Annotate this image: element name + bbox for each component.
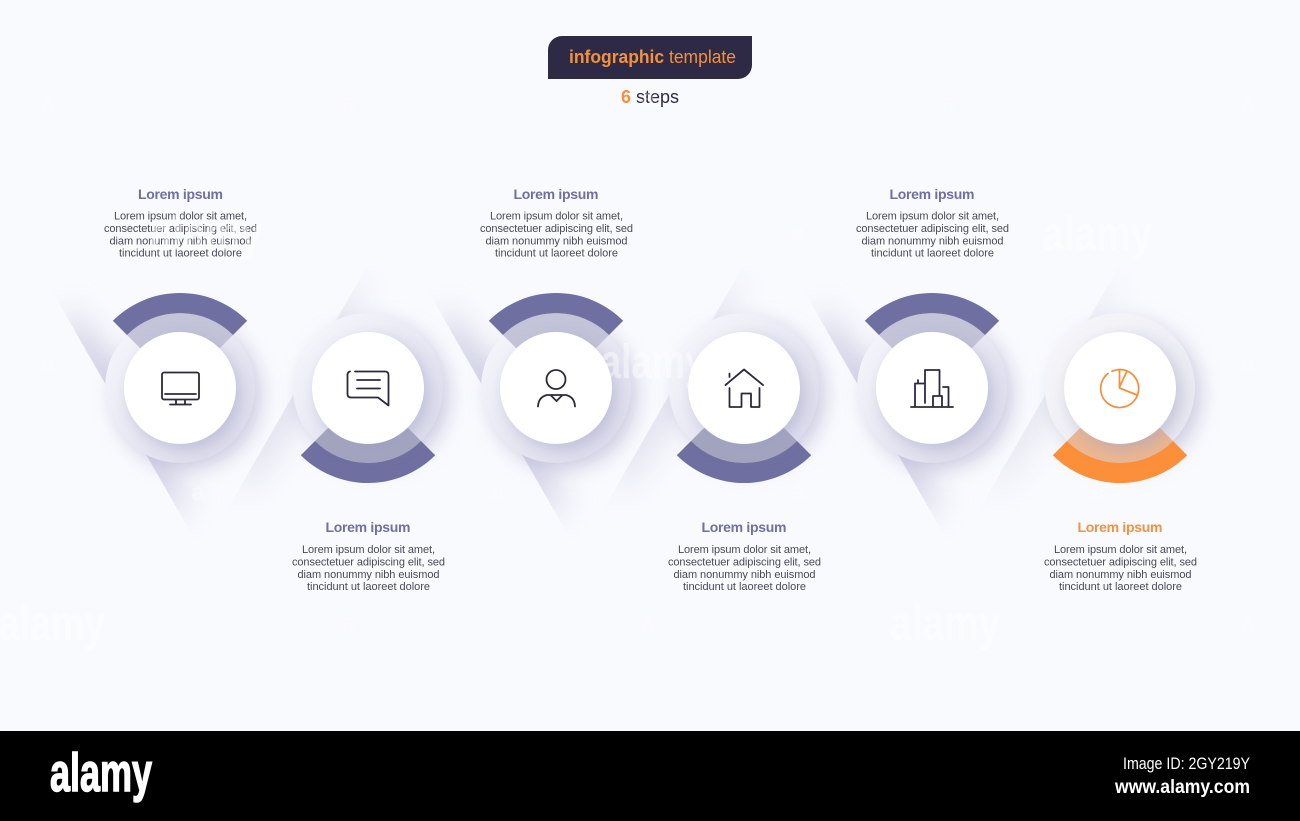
circle 2 with bottom arc bbox=[293, 313, 443, 483]
watermarks: a bbox=[641, 85, 655, 112]
icon: speech bubble bbox=[348, 372, 388, 406]
text block 2 bbox=[292, 544, 445, 593]
icon: buildings bbox=[911, 370, 953, 407]
text block 4: Lorem ipsum dolor sit amet, bbox=[678, 544, 811, 556]
text block 6: diam nonummy nibh euismod bbox=[1050, 569, 1192, 581]
heading 2: Lorem ipsum bbox=[326, 519, 410, 535]
footer logo: alamy bbox=[50, 743, 152, 803]
text block 3 bbox=[480, 210, 633, 260]
subtitle: 6 steps: 6 steps bbox=[621, 87, 679, 107]
step 2 bbox=[292, 313, 445, 593]
watermarks: a bbox=[941, 89, 955, 116]
watermarks: a bbox=[1241, 609, 1255, 636]
step 3 bbox=[480, 186, 633, 463]
icon: person bbox=[538, 370, 575, 406]
text block 2: diam nonummy nibh euismod bbox=[298, 569, 440, 581]
text block 2: Lorem ipsum dolor sit amet, bbox=[302, 544, 435, 556]
circle 1 with top arc bbox=[105, 293, 255, 463]
watermarks: alamy bbox=[890, 595, 1000, 651]
text block 3: tincidunt ut laoreet dolore bbox=[495, 248, 618, 260]
text block 6: Lorem ipsum dolor sit amet, bbox=[1054, 544, 1187, 556]
watermarks: a bbox=[1241, 350, 1255, 377]
text block 4: consectetuer adipiscing elit, sed bbox=[668, 556, 821, 568]
icon: house bbox=[726, 370, 763, 407]
text block 1 bbox=[104, 210, 257, 260]
text block 4 bbox=[668, 544, 821, 593]
text block 3: consectetuer adipiscing elit, sed bbox=[480, 223, 633, 235]
watermarks: a bbox=[791, 479, 805, 506]
text block 4: diam nonummy nibh euismod bbox=[674, 569, 816, 581]
heading 5: Lorem ipsum bbox=[890, 186, 974, 202]
watermarks: a bbox=[341, 89, 355, 116]
text block 1: tincidunt ut laoreet dolore bbox=[119, 248, 242, 260]
text block 5: tincidunt ut laoreet dolore bbox=[871, 248, 994, 260]
text block 6 bbox=[1044, 544, 1197, 593]
text block 5: diam nonummy nibh euismod bbox=[862, 236, 1004, 248]
step 4 bbox=[668, 313, 821, 593]
circle 6 with orange bottom arc bbox=[1045, 313, 1195, 483]
step 6 bbox=[1044, 313, 1197, 593]
heading 6: Lorem ipsum bbox=[1078, 519, 1162, 535]
header: title pill bbox=[548, 36, 752, 79]
header: title pill: infographic template bbox=[569, 47, 736, 67]
watermarks: a bbox=[491, 479, 505, 506]
watermarks: a bbox=[341, 609, 355, 636]
text block 2: consectetuer adipiscing elit, sed bbox=[292, 556, 445, 568]
watermarks: a bbox=[1241, 89, 1255, 116]
watermarks: alamy bbox=[600, 336, 706, 389]
text block 3: Lorem ipsum dolor sit amet, bbox=[490, 210, 623, 222]
watermarks bbox=[0, 85, 1255, 651]
text block 3: diam nonummy nibh euismod bbox=[486, 236, 628, 248]
watermarks: alamy bbox=[150, 208, 262, 261]
circle 4 with bottom arc bbox=[669, 313, 819, 483]
icon: pie chart bbox=[1101, 370, 1139, 407]
text block 1: consectetuer adipiscing elit, sed bbox=[104, 223, 257, 235]
circle 5 with top arc bbox=[857, 293, 1007, 463]
watermarks: a bbox=[1091, 479, 1105, 506]
text block 6: tincidunt ut laoreet dolore bbox=[1059, 581, 1182, 593]
text block 5 bbox=[856, 210, 1009, 260]
watermarks: alamy bbox=[0, 595, 105, 651]
text block 1: Lorem ipsum dolor sit amet, bbox=[114, 210, 247, 222]
text block 5: consectetuer adipiscing elit, sed bbox=[856, 223, 1009, 235]
heading 4: Lorem ipsum bbox=[702, 519, 786, 535]
text block 6: consectetuer adipiscing elit, sed bbox=[1044, 556, 1197, 568]
text block 4: tincidunt ut laoreet dolore bbox=[683, 581, 806, 593]
watermarks: a bbox=[791, 220, 805, 247]
footer url: www.alamy.com bbox=[1114, 777, 1250, 798]
step 5 bbox=[856, 186, 1009, 463]
text block 2: tincidunt ut laoreet dolore bbox=[307, 581, 430, 593]
watermarks: a bbox=[41, 350, 55, 377]
watermarks: a bbox=[41, 89, 55, 116]
icon: monitor bbox=[162, 372, 199, 404]
step 1 bbox=[104, 186, 257, 463]
watermarks: alamy bbox=[1042, 208, 1152, 261]
heading 3: Lorem ipsum bbox=[514, 186, 598, 202]
text block 1: diam nonummy nibh euismod bbox=[110, 236, 252, 248]
folded diagonal shadows bbox=[66, 292, 1106, 514]
circle 3 with top arc bbox=[481, 293, 631, 463]
watermarks: a bbox=[191, 479, 205, 506]
footer image id: Image ID: 2GY219Y bbox=[1123, 754, 1250, 773]
text block 5: Lorem ipsum dolor sit amet, bbox=[866, 210, 999, 222]
watermarks: a bbox=[641, 609, 655, 636]
heading 1: Lorem ipsum bbox=[138, 186, 223, 202]
footer bar bbox=[0, 731, 1300, 821]
